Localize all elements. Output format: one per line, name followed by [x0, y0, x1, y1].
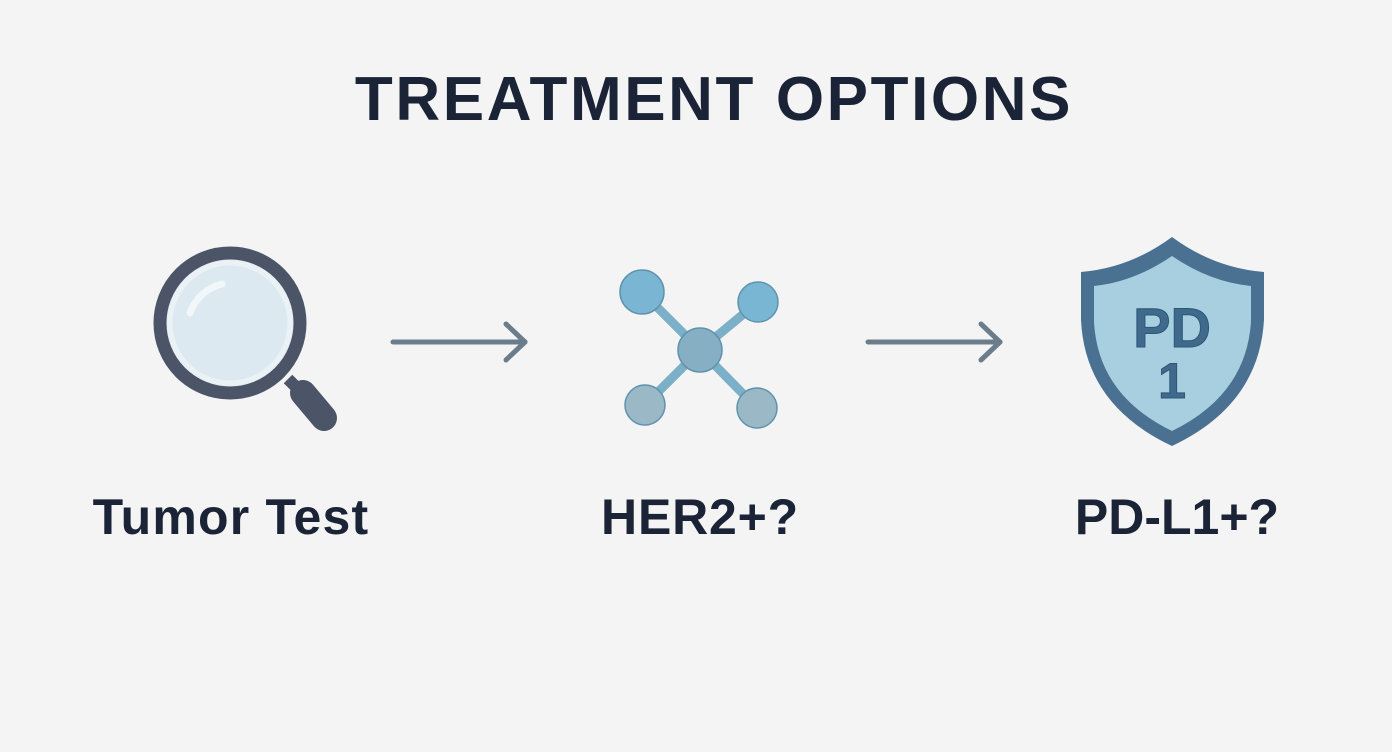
title: TREATMENT OPTIONS [355, 65, 1073, 134]
icon: shield PD1 [1081, 237, 1264, 446]
label: HER2: HER2+? [601, 489, 799, 545]
icon: shield PD1: 1 [1158, 353, 1186, 409]
icon: shield PD1: PD [1133, 296, 1211, 359]
icon: magnifying glass [160, 253, 324, 418]
label: tumor test: Tumor Test [93, 489, 369, 545]
arrow 2 [868, 324, 1000, 360]
label: PD-L1: PD-L1+? [1075, 489, 1279, 545]
icon: molecule [620, 270, 778, 428]
arrow 1 [393, 324, 525, 360]
